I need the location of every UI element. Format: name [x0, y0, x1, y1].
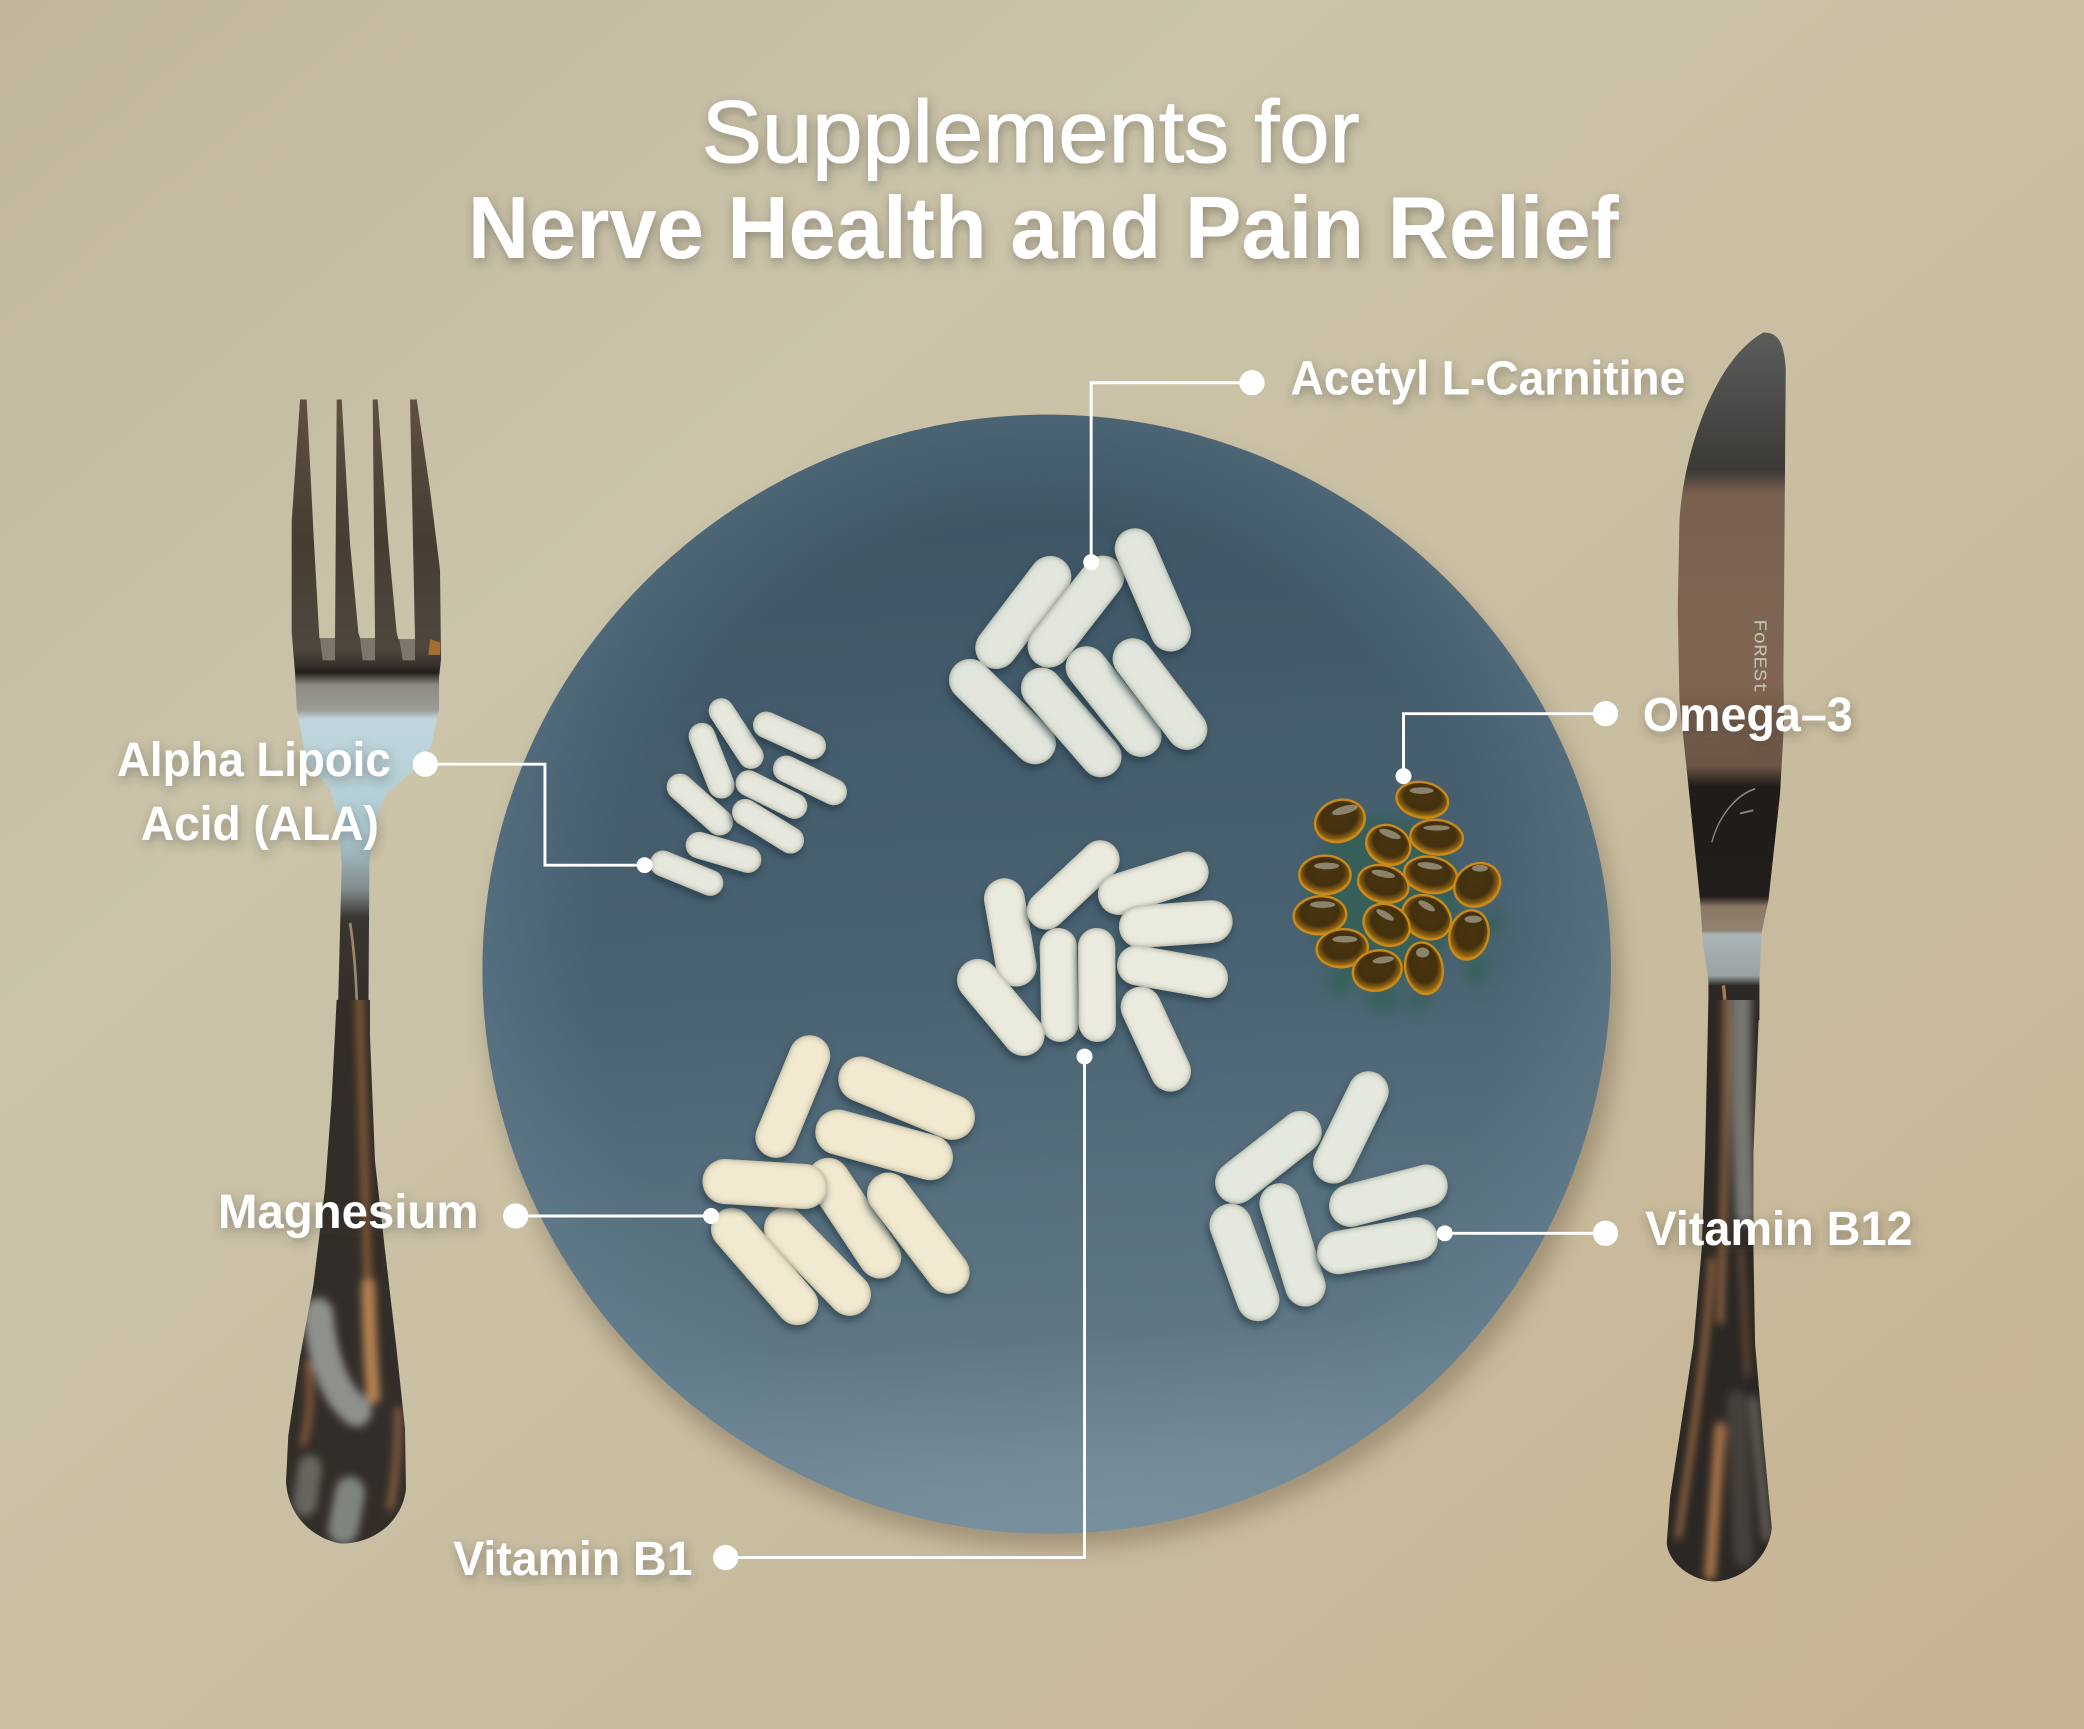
title: Supplements for [702, 83, 1360, 181]
capsules: Alpha Lipoic Acid [663, 711, 834, 883]
softgel shadows [1307, 817, 1502, 1012]
label: Alpha Lipoic Acid [117, 734, 391, 851]
softgel capsules [1292, 778, 1509, 997]
capsules: Vitamin B1 [978, 860, 1211, 1071]
softgels: Omega-3 [1292, 778, 1509, 1012]
connector: Omega-3 [1396, 701, 1618, 784]
label: Acetyl L-Carnitine: Acetyl L-Carnitine [1291, 353, 1685, 406]
knife blade [1678, 333, 1786, 1020]
label: Alpha Lipoic Acid: Alpha Lipoic [117, 734, 391, 787]
knife engraving: FoRESt [1748, 619, 1769, 694]
connector: Acetyl L-Carnitine [1083, 370, 1265, 570]
fork [286, 400, 441, 1543]
label: Vitamin B1: Vitamin B1 [453, 1533, 692, 1586]
label: Alpha Lipoic Acid: Acid (ALA) [141, 798, 379, 851]
plate [482, 415, 1620, 1548]
connector: Alpha Lipoic Acid [413, 752, 653, 873]
title: Nerve Health and Pain Relief [468, 179, 1620, 277]
softgel highlights [1310, 787, 1488, 965]
capsules: Magnesium [725, 1056, 952, 1304]
capsules: Vitamin B12 [1231, 1092, 1426, 1300]
knife handle [1667, 988, 1772, 1581]
label: Vitamin B12: Vitamin B12 [1645, 1203, 1913, 1256]
connector: Vitamin B12 [1437, 1221, 1618, 1246]
fork head [292, 400, 441, 1020]
label: Magnesium: Magnesium [218, 1186, 478, 1239]
connector: Vitamin B1 [713, 1049, 1093, 1570]
fork handle [286, 989, 406, 1543]
label: Omega-3: Omega–3 [1643, 689, 1853, 742]
capsules: Acetyl L-Carnitine [970, 549, 1187, 757]
connector: Magnesium [503, 1203, 719, 1229]
knife [1667, 333, 1786, 1581]
title [468, 83, 1620, 277]
